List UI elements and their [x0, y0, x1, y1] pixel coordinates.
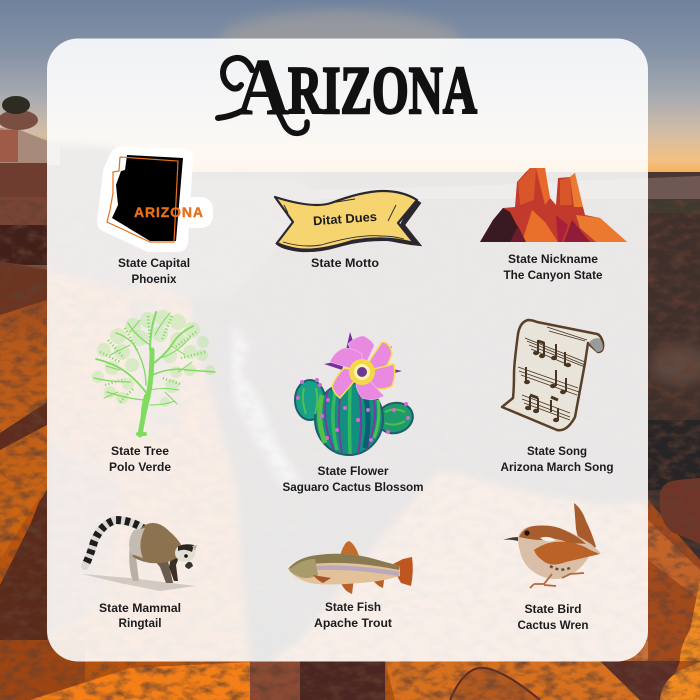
item: state capital — [107, 155, 213, 286]
item: state mammal — [82, 520, 197, 630]
caption: state song: State Song — [527, 445, 587, 458]
caption: state nickname: The Canyon State — [504, 269, 603, 282]
icon: Arizona state map sticker: ARIZONA — [134, 204, 203, 220]
caption: state flower: Saguaro Cactus Blossom — [282, 481, 424, 494]
icon: cactus wren — [503, 503, 601, 588]
caption: state bird: State Bird — [524, 603, 582, 616]
title — [218, 44, 477, 133]
under-panel soft shapes — [0, 143, 670, 670]
item: state tree — [92, 310, 215, 474]
caption: state mammal: Ringtail — [118, 617, 162, 630]
title: RIZONA — [288, 52, 477, 128]
caption: state motto: State Motto — [311, 257, 379, 270]
caption: state bird: Cactus Wren — [518, 619, 588, 632]
caption: state fish: Apache Trout — [314, 617, 392, 630]
icon: yellow ribbon banner: Ditat Dues — [313, 210, 377, 228]
caption: state capital: Phoenix — [132, 273, 177, 286]
rocks bottom — [0, 661, 700, 700]
item: state nickname — [480, 168, 627, 282]
icon: yellow ribbon banner — [275, 191, 420, 251]
caption: state capital: State Capital — [118, 257, 190, 270]
title: A — [237, 44, 289, 132]
item: state song — [500, 320, 614, 474]
caption: state song: Arizona March Song — [500, 461, 614, 474]
icon: apache trout — [288, 541, 413, 594]
item: state flower — [282, 332, 424, 494]
cliff left — [0, 128, 60, 165]
item: state fish — [288, 541, 413, 630]
caption: state fish: State Fish — [325, 601, 381, 614]
caption: state flower: State Flower — [318, 465, 389, 478]
caption: state tree: State Tree — [111, 445, 170, 458]
item: state bird — [503, 503, 601, 632]
panel: translucent white card — [47, 38, 648, 662]
icon: sheet music scroll — [502, 320, 603, 430]
icon: ringtail — [82, 520, 197, 591]
caption: state nickname: State Nickname — [508, 253, 599, 266]
caption: state tree: Polo Verde — [109, 461, 172, 474]
caption: state mammal: State Mammal — [99, 602, 181, 615]
item: state motto — [275, 191, 420, 270]
icon: green palo verde tree — [92, 310, 215, 435]
icon: red rock mesa — [480, 168, 627, 242]
icon: flowering barrel cactus — [295, 332, 416, 455]
rocks lower right — [600, 500, 700, 700]
